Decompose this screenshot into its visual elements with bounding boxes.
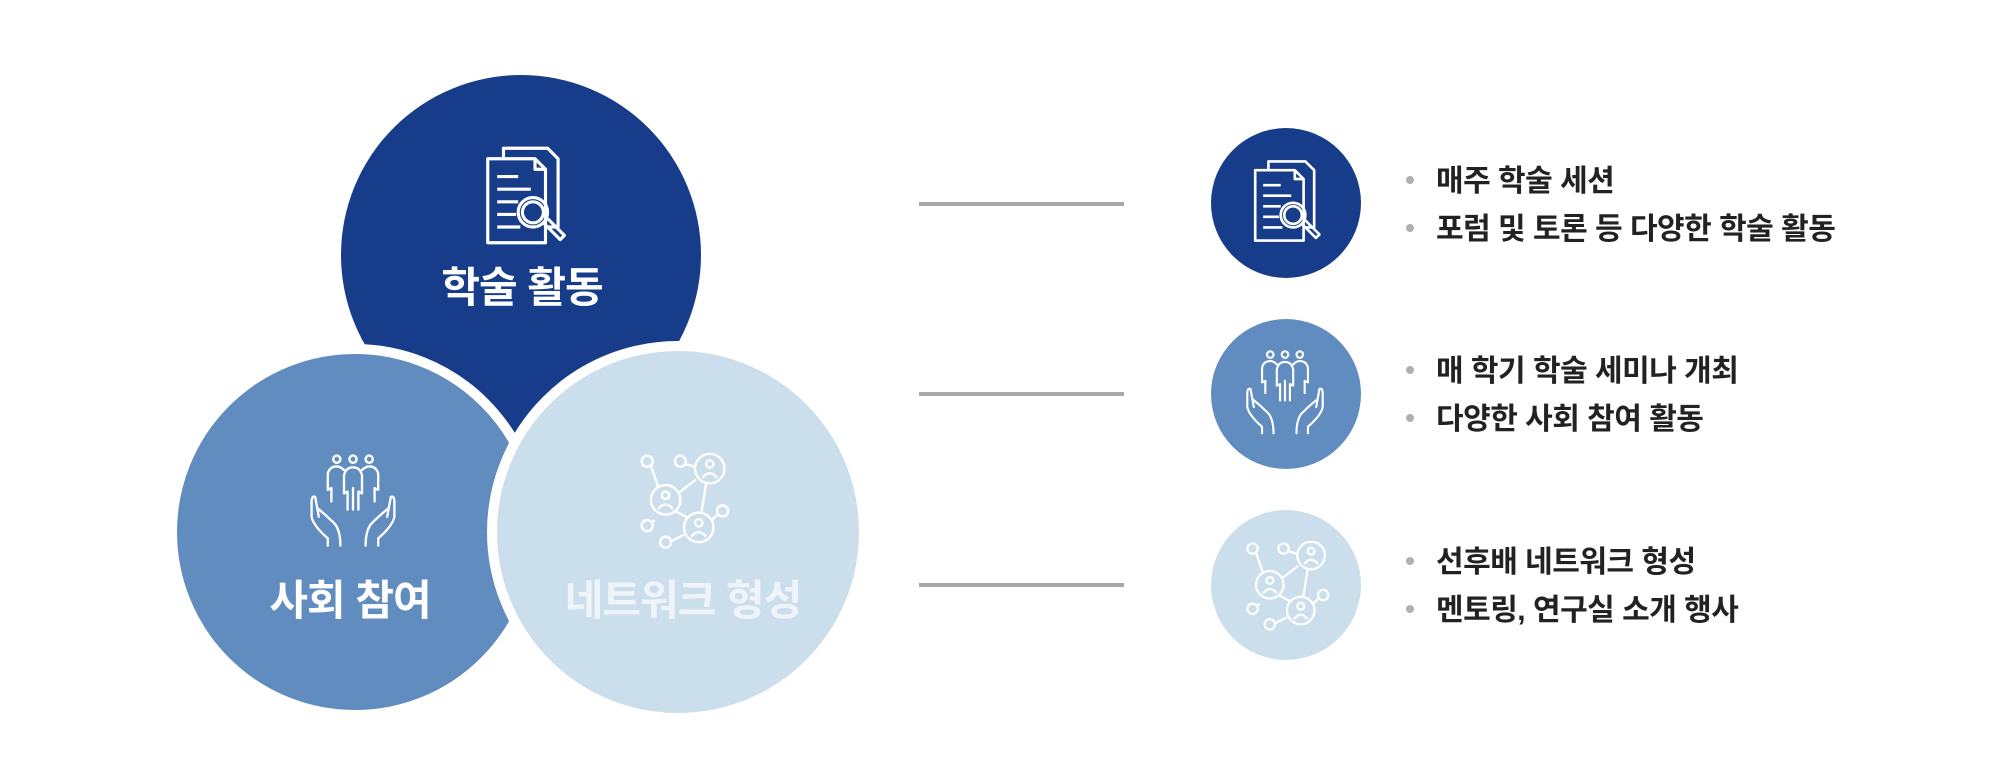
bullets 3: 선후배 네트워크 형성 <box>1436 546 1696 579</box>
icon: network <box>642 454 728 548</box>
bullets 3: 멘토링, 연구실 소개 행사 <box>1436 594 1738 627</box>
bullets 1 <box>1406 165 1835 246</box>
circle: 학술 활동 <box>341 75 701 435</box>
bullets 2: 매 학기 학술 세미나 개최 <box>1436 355 1738 388</box>
item 1: 학술 활동 <box>1211 128 1835 278</box>
title: 사회 참여: 사회 참여 <box>269 577 431 624</box>
icon: hands with people <box>312 456 394 546</box>
connector lines <box>919 204 1124 585</box>
item 2: 사회 참여 <box>1211 319 1738 469</box>
bullets 3 <box>1406 546 1738 627</box>
title: 네트워크 형성: 네트워크 형성 <box>565 577 801 624</box>
icon: hands small <box>1247 351 1323 433</box>
bullets 1: 포럼 및 토론 등 다양한 학술 활동 <box>1436 213 1835 246</box>
icon: document search small <box>1255 161 1319 241</box>
icon: network small <box>1247 542 1328 629</box>
circle: 사회 참여 <box>172 349 538 715</box>
icon: document search <box>488 148 564 243</box>
bullets 1: 매주 학술 세션 <box>1436 165 1614 198</box>
bullets 2: 다양한 사회 참여 활동 <box>1436 403 1703 436</box>
item 3: 네트워크 형성 <box>1211 510 1738 660</box>
title: 학술 활동: 학술 활동 <box>441 264 603 311</box>
bullets 2 <box>1406 355 1738 436</box>
circle: 네트워크 형성 <box>492 346 864 718</box>
